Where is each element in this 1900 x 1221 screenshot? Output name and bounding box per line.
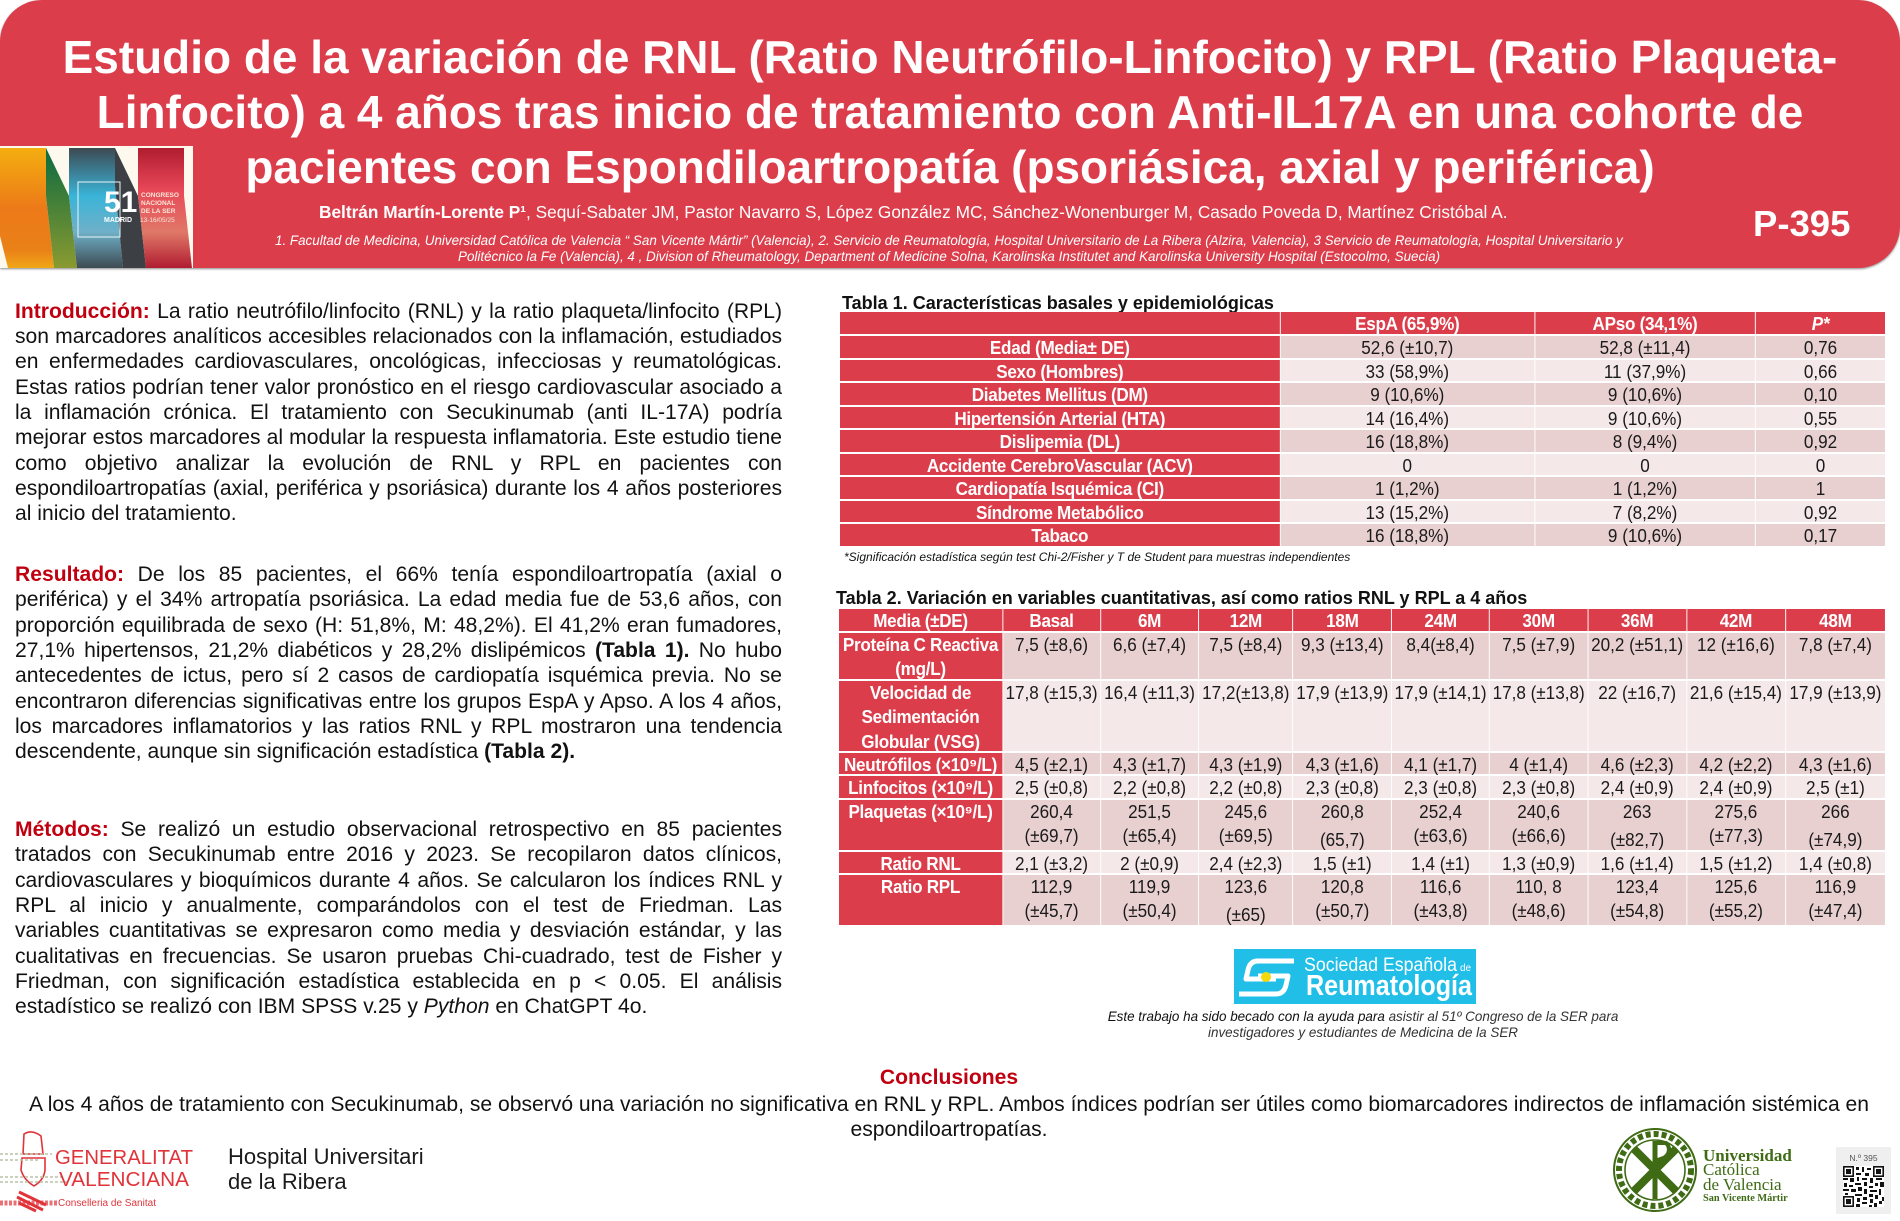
table 1: baseline characteristics: 0,10 xyxy=(1804,385,1837,405)
table 1: baseline characteristics: 1 (1,2%) xyxy=(1613,479,1677,499)
table 2: quantitative variables: 20,2 (±51,1) xyxy=(1591,635,1683,655)
affiliations: 1. Facultad de Medicina, Universidad Católica de Valencia “ San Vicente Mártir” (Valencia), 2. Servicio de Reumatología, Hospital Universitario de La Ribera (Alzira, Valencia), 3 Servicio de Reumatología, Hospital Universitario y xyxy=(275,233,1623,248)
table 2: quantitative variables: 120,8 xyxy=(1321,877,1364,897)
table 2: quantitative variables: (±65) xyxy=(1226,905,1266,925)
text block: introducción: la inflamación crónica. El tratamiento con Secukinumab (anti IL-17A) podría xyxy=(15,401,782,424)
poster number: P-395 xyxy=(1753,203,1850,244)
table 1: baseline characteristics: 33 (58,9%) xyxy=(1365,362,1449,382)
table 2 header row: 6M xyxy=(1138,611,1161,631)
table 2: quantitative variables: 7,5 (±7,9) xyxy=(1502,635,1575,655)
table 2: quantitative variables: (mg/L) xyxy=(895,659,946,679)
table 1 heading: Tabla 1. Características basales y epidemiológicas xyxy=(842,293,1274,313)
table 1: baseline characteristics: 0 xyxy=(1403,456,1412,476)
table 2: quantitative variables: 2 (±0,9) xyxy=(1120,854,1179,874)
table 2: quantitative variables: 2,2 (±0,8) xyxy=(1113,778,1186,798)
table 2: quantitative variables: 17,8 (±15,3) xyxy=(1005,683,1098,703)
table 1: baseline characteristics: 16 (18,8%) xyxy=(1365,432,1449,452)
table 2: quantitative variables: Neutrófilos (×10⁹/L) xyxy=(844,755,997,775)
table 2: quantitative variables: 2,3 (±0,8) xyxy=(1502,778,1575,798)
table 2: quantitative variables: 7,5 (±8,4) xyxy=(1209,635,1282,655)
table 2 header row: 48M xyxy=(1819,611,1852,631)
conclusions heading: Conclusiones xyxy=(880,1066,1018,1089)
table 2: quantitative variables: 2,4 (±2,3) xyxy=(1209,854,1282,874)
table 1: baseline characteristics: 16 (18,8%) xyxy=(1365,526,1449,546)
table 1: baseline characteristics: 0,55 xyxy=(1804,409,1837,429)
table 2: quantitative variables: 2,3 (±0,8) xyxy=(1306,778,1379,798)
hospital name: Hospital Universitari xyxy=(228,1144,424,1168)
table 2: quantitative variables: 110, 8 xyxy=(1515,877,1562,897)
table 1: baseline characteristics: 0,92 xyxy=(1804,432,1837,452)
table 2 header row: 36M xyxy=(1621,611,1653,631)
text block: métodos: Friedman, con significación estadística establecida en p < 0.05. El análisis xyxy=(15,970,782,993)
title: Linfocito) a 4 años tras inicio de tratamiento con Anti-IL17A en una cohorte de xyxy=(97,86,1803,138)
affiliations xyxy=(275,233,1624,264)
table 2: quantitative variables: Sedimentación xyxy=(862,707,979,727)
table 2: quantitative variables: 125,6 xyxy=(1715,877,1757,897)
table 2: quantitative variables: 17,9 (±13,9) xyxy=(1296,683,1388,703)
table 1: baseline characteristics: Accidente CerebroVascular (ACV) xyxy=(927,456,1193,476)
table 2 heading: Tabla 2. Variación en variables cuantitativas, así como ratios RNL y RPL a 4 años xyxy=(836,588,1527,608)
table 2: quantitative variables: 4,3 (±1,6) xyxy=(1799,755,1872,775)
table 2 header row: 30M xyxy=(1522,611,1555,631)
table 2: quantitative variables: (±50,4) xyxy=(1123,901,1177,921)
title xyxy=(63,31,1837,193)
icon: congress banner: 51 xyxy=(104,186,137,219)
conclusions text xyxy=(29,1092,1869,1141)
text block: métodos xyxy=(15,818,782,1018)
table 2: quantitative variables: (±69,5) xyxy=(1219,826,1273,846)
text block: resultado: los marcadores inflamatorios y las ratios RNL y RPL mostraron una tendencia xyxy=(15,715,782,738)
text block: resultado: Resultado: De los 85 pacientes, el 66% tenía espondiloartropatía (axial o xyxy=(15,563,782,586)
table 2 header row: Media (±DE) xyxy=(873,611,968,631)
table 2: quantitative variables: 123,6 xyxy=(1224,877,1267,897)
grant note: Este trabajo ha sido becado con la ayuda para asistir al 51º Congreso de la SER para xyxy=(1108,1009,1618,1024)
table 1: baseline characteristics: 13 (15,2%) xyxy=(1365,503,1449,523)
table 1: baseline characteristics: 52,6 (±10,7) xyxy=(1361,338,1453,358)
conclusions text: espondiloartropatías. xyxy=(850,1118,1048,1141)
table 2: quantitative variables: 2,2 (±0,8) xyxy=(1209,778,1282,798)
text block: resultado: 27,1% hipertensos, 21,2% diabéticos y 28,2% dislipémicos (Tabla 1). No hubo xyxy=(15,639,782,662)
table 2 header row: 12M xyxy=(1230,611,1262,631)
text block: resultado: encontraron diferencias significativas entre los grupos EspA y Apso. A los 4 años, xyxy=(15,690,782,713)
table 2: quantitative variables: 116,6 xyxy=(1420,877,1461,897)
authors: Beltrán Martín-Lorente P¹, Sequí-Sabater JM, Pastor Navarro S, López González MC, Sánchez-Wonenburger M, Casado Poveda D, Martínez Cristóbal A. xyxy=(319,202,1508,222)
table 2: quantitative variables: 8,4(±8,4) xyxy=(1406,635,1475,655)
table 2: quantitative variables: (±77,3) xyxy=(1709,826,1763,846)
table 2 header row: 18M xyxy=(1326,611,1359,631)
table 1: baseline characteristics: 11 (37,9%) xyxy=(1604,362,1686,382)
table 2: quantitative variables: 240,6 xyxy=(1517,802,1560,822)
table 2: quantitative variables: 9,3 (±13,4) xyxy=(1301,635,1384,655)
text block: métodos: RPL al inicio y anualmente, comparándolos con el test de Friedman. Las xyxy=(15,894,782,917)
table 2: quantitative variables: 245,6 xyxy=(1224,802,1267,822)
table 2: quantitative variables: 4,2 (±2,2) xyxy=(1699,755,1772,775)
text block: métodos: cualitativas en frecuencias. Se usaron pruebas Chi-cuadrado, test de Fisher y xyxy=(15,945,782,968)
table 2: quantitative variables: (±47,4) xyxy=(1808,901,1862,921)
table 1: baseline characteristics: Sexo (Hombres) xyxy=(996,362,1123,382)
text block: introducción: Introducción: La ratio neutrófilo/linfocito (RNL) y la ratio plaqueta/linfocito (RPL) xyxy=(15,300,782,322)
icon: congress banner: MADRID xyxy=(104,217,132,224)
table 1: baseline characteristics: 0,76 xyxy=(1804,338,1837,358)
table 2: quantitative variables: 260,4 xyxy=(1030,802,1073,822)
logo: Generalitat Valenciana: VALENCIANA xyxy=(59,1169,190,1191)
table 2: quantitative variables: 6,6 (±7,4) xyxy=(1113,635,1186,655)
table 2: quantitative variables: 7,8 (±7,4) xyxy=(1799,635,1872,655)
text block: introducción: Estas ratios podrían tener valor pronóstico en el riesgo cardiovascular asociado a xyxy=(15,376,782,399)
conclusions text: A los 4 años de tratamiento con Secukinumab, se observó una variación no significativa en RNL y RPL. Ambos índices podrían ser útiles como biomarcadores indirectos de inflamación sistémica en xyxy=(29,1092,1869,1116)
table 2: quantitative variables: 1,3 (±0,9) xyxy=(1502,854,1575,874)
icon: congress banner: 13-16/05/25 xyxy=(140,217,175,224)
table 2: quantitative variables: 2,1 (±3,2) xyxy=(1015,854,1088,874)
logo: Universidad Católica de Valencia xyxy=(1613,1128,1792,1212)
grant note xyxy=(1108,1009,1618,1040)
table 1: baseline characteristics: 0 xyxy=(1640,456,1650,476)
table 2: quantitative variables: 4,1 (±1,7) xyxy=(1404,755,1477,775)
table 2: quantitative variables: 119,9 xyxy=(1129,877,1170,897)
table 2: quantitative variables: 2,5 (±0,8) xyxy=(1015,778,1088,798)
table 2: quantitative variables: 1,4 (±0,8) xyxy=(1799,854,1872,874)
icon: congress banner: DE LA SER xyxy=(141,208,176,215)
table 2 header row: 42M xyxy=(1720,611,1752,631)
table 2: quantitative variables: Ratio RNL xyxy=(880,854,961,874)
table 2: quantitative variables: (±45,7) xyxy=(1024,901,1079,921)
table 2: quantitative variables: 16,4 (±11,3) xyxy=(1104,683,1195,703)
text block: resultado: periférica) y el 34% artropatía psoriásica. La edad media fue de 53,6 años, con xyxy=(15,588,782,611)
table 2: quantitative variables: 4,6 (±2,3) xyxy=(1601,755,1674,775)
text block: métodos: cardiovasculares y bioquímicos durante 4 años. Se calcularon los índices RNL y xyxy=(15,869,782,892)
table 1: baseline characteristics: Síndrome Metabólico xyxy=(976,503,1144,523)
logo: Universidad Católica de Valencia: de Valencia xyxy=(1703,1175,1782,1194)
table 1 header row: P* xyxy=(1812,314,1829,334)
table 1: baseline characteristics: 9 (10,6%) xyxy=(1370,385,1444,405)
table 1: baseline characteristics: 0,66 xyxy=(1804,362,1837,382)
table 2: quantitative variables: 116,9 xyxy=(1815,877,1856,897)
table 2: quantitative variables: (±69,7) xyxy=(1024,826,1079,846)
table 2: quantitative variables: 4,3 (±1,9) xyxy=(1209,755,1282,775)
table 2: quantitative variables: (±43,8) xyxy=(1414,901,1468,921)
hospital name: de la Ribera xyxy=(228,1168,347,1194)
logo: Universidad Católica de Valencia: San Vicente Mártir xyxy=(1703,1193,1788,1204)
table 1 header row: EspA (65,9%) xyxy=(1355,314,1459,334)
text block: introducción: como objetivo analizar la evolución de RNL y RPL en pacientes con xyxy=(15,452,782,475)
text block: métodos: estadístico se realizó con IBM SPSS v.25 y Python en ChatGPT 4o. xyxy=(15,995,647,1018)
table 2: quantitative variables: (±55,2) xyxy=(1709,901,1763,921)
QR code panel: N.º 395 xyxy=(1849,1153,1878,1163)
table 2: quantitative variables: Velocidad de xyxy=(870,683,971,703)
table 1 header row: APso (34,1%) xyxy=(1593,314,1697,334)
table 2: quantitative variables: (±74,9) xyxy=(1808,830,1862,850)
table 2: quantitative variables: 266 xyxy=(1821,802,1850,822)
text block: métodos: Métodos: Se realizó un estudio observacional retrospectivo en 85 pacientes xyxy=(15,818,782,841)
table 2: quantitative variables: Linfocitos (×10⁹/L) xyxy=(848,778,993,798)
table 2: quantitative variables: (65,7) xyxy=(1320,830,1365,850)
table 2: quantitative variables: (±66,6) xyxy=(1512,826,1566,846)
table 2: quantitative variables: Proteína C Reactiva xyxy=(843,635,998,655)
table 1: baseline characteristics: 9 (10,6%) xyxy=(1608,385,1682,405)
table 2: quantitative variables: 22 (±16,7) xyxy=(1598,683,1676,703)
table 2: quantitative variables: 17,8 (±13,8) xyxy=(1493,683,1585,703)
logo: Generalitat Valenciana: GENERALITAT xyxy=(55,1147,193,1169)
title: Estudio de la variación de RNL (Ratio Neutrófilo-Linfocito) y RPL (Ratio Plaqueta- xyxy=(63,31,1837,83)
table 2: quantitative variables: 4,5 (±2,1) xyxy=(1015,755,1088,775)
table 2 header row: Basal xyxy=(1029,611,1074,631)
table 2: quantitative variables: (±50,7) xyxy=(1315,901,1369,921)
title: pacientes con Espondiloartropatía (psoriásica, axial y periférica) xyxy=(245,141,1655,193)
table 2: quantitative variables: (±82,7) xyxy=(1610,830,1664,850)
table 1: baseline characteristics xyxy=(840,312,1885,546)
text block: resultado: proporción equilibrada de sexo (H: 51,8%, M: 48,2%). El 41,2% eran fumadores, xyxy=(15,614,782,637)
icon: SER logo: Sociedad Española xyxy=(1304,955,1457,976)
table 1: baseline characteristics: 1 xyxy=(1816,479,1825,499)
table 2: quantitative variables: (±54,8) xyxy=(1610,901,1664,921)
table 2: quantitative variables: 112,9 xyxy=(1031,877,1072,897)
text block: introducción: mejorar estos marcadores al modular la respuesta inflamatoria. Este estudio tiene xyxy=(15,426,782,449)
icon: SER logo: de xyxy=(1460,963,1472,974)
hospital name xyxy=(228,1144,424,1194)
table 2: quantitative variables: 1,5 (±1,2) xyxy=(1699,854,1772,874)
table 1 header row xyxy=(840,312,1885,334)
table 1: baseline characteristics: 0 xyxy=(1816,456,1825,476)
table 2: quantitative variables xyxy=(839,609,1885,925)
table 1: baseline characteristics: Tabaco xyxy=(1031,526,1088,546)
text block: resultado: antecedentes de ictus, pero sí 2 casos de cardiopatía isquémica previa. No se xyxy=(15,664,782,687)
table 2: quantitative variables: 2,4 (±0,9) xyxy=(1699,778,1772,798)
icon: congress banner: NACIONAL xyxy=(141,200,175,207)
table 2: quantitative variables: 260,8 xyxy=(1321,802,1364,822)
table 2: quantitative variables: 21,6 (±15,4) xyxy=(1690,683,1782,703)
icon: congress banner xyxy=(0,146,193,268)
table 1: baseline characteristics: Hipertensión Arterial (HTA) xyxy=(954,409,1165,429)
table 1: baseline characteristics: 7 (8,2%) xyxy=(1613,503,1677,523)
header banner xyxy=(0,0,1900,268)
table 2: quantitative variables: 1,6 (±1,4) xyxy=(1601,854,1674,874)
table 2: quantitative variables: Globular (VSG) xyxy=(861,732,980,752)
text block: métodos: tratados con Secukinumab entre 2016 y 2023. Se recopilaron datos clínicos, xyxy=(15,843,782,866)
table 2: quantitative variables: 123,4 xyxy=(1616,877,1659,897)
text block: introducción xyxy=(15,300,782,525)
table 2: quantitative variables: 263 xyxy=(1623,802,1651,822)
table 2: quantitative variables: (±63,6) xyxy=(1414,826,1468,846)
QR code panel xyxy=(1836,1147,1891,1214)
table 1: baseline characteristics: 14 (16,4%) xyxy=(1365,409,1449,429)
text block: introducción: espondiloartropatías (axial, periférica y psoriásica) durante los 4 años posteriores xyxy=(15,477,782,500)
table 2 header row xyxy=(839,609,1885,631)
table 2: quantitative variables: 275,6 xyxy=(1715,802,1757,822)
table 2: quantitative variables: 7,5 (±8,6) xyxy=(1015,635,1088,655)
text block: introducción: en enfermedades cardiovasculares, oncológicas, infecciosas y reumatológicas. xyxy=(15,350,782,373)
table 2 header row: 24M xyxy=(1424,611,1457,631)
table 2: quantitative variables: 4,3 (±1,7) xyxy=(1113,755,1186,775)
logo: Universidad Católica de Valencia: Católica xyxy=(1703,1160,1760,1179)
table 1: baseline characteristics: 8 (9,4%) xyxy=(1613,432,1677,452)
text block: métodos: variables cuantitativas se expresaron como media y desviación estándar, y las xyxy=(15,919,782,942)
table 2: quantitative variables: 2,5 (±1) xyxy=(1806,778,1865,798)
table 1: baseline characteristics: 0,17 xyxy=(1804,526,1837,546)
logo: Generalitat Valenciana xyxy=(0,1131,193,1212)
text block: introducción: al inicio del tratamiento. xyxy=(15,502,237,525)
table 2: quantitative variables: Plaquetas (×10⁹/L) xyxy=(848,802,993,822)
table 1 footnote: *Significación estadística según test Chi-2/Fisher y T de Student para muestras independientes xyxy=(844,550,1350,564)
table 1: baseline characteristics: Edad (Media± DE) xyxy=(990,338,1130,358)
table 2: quantitative variables: 1,5 (±1) xyxy=(1313,854,1372,874)
text block: resultado xyxy=(15,563,782,763)
text block: resultado: descendente, aunque sin significación estadística (Tabla 2). xyxy=(15,740,575,763)
table 2: quantitative variables: 17,2(±13,8) xyxy=(1202,683,1289,703)
table 2: quantitative variables: 12 (±16,6) xyxy=(1697,635,1775,655)
table 2: quantitative variables: 251,5 xyxy=(1128,802,1171,822)
table 1: baseline characteristics: 9 (10,6%) xyxy=(1608,409,1682,429)
table 2: quantitative variables: 252,4 xyxy=(1419,802,1462,822)
table 1: baseline characteristics: Diabetes Mellitus (DM) xyxy=(972,385,1148,405)
logo: Universidad Católica de Valencia: Universidad xyxy=(1703,1146,1792,1165)
table 2: quantitative variables: 4,3 (±1,6) xyxy=(1306,755,1379,775)
grant note: investigadores y estudiantes de Medicina de la SER xyxy=(1208,1025,1518,1040)
table 2: quantitative variables: Ratio RPL xyxy=(881,877,960,897)
table 2: quantitative variables: (±48,6) xyxy=(1512,901,1566,921)
table 1: baseline characteristics: 0,92 xyxy=(1804,503,1837,523)
affiliations: Politécnico la Fe (Valencia), 4 , Division of Rheumatology, Department of Medicine Solna, Karolinska Institutet and Karolinska University Hospital (Estocolmo, Suecia) xyxy=(458,249,1440,264)
table 1: baseline characteristics: 52,8 (±11,4) xyxy=(1600,338,1690,358)
table 2: quantitative variables: 2,3 (±0,8) xyxy=(1404,778,1477,798)
table 2: quantitative variables: 1,4 (±1) xyxy=(1411,854,1470,874)
text block: introducción: son marcadores analíticos accesibles relacionados con la inflamación, estudiados xyxy=(15,325,782,348)
table 1: baseline characteristics: Cardiopatía Isquémica (CI) xyxy=(956,479,1164,499)
table 2: quantitative variables: 17,9 (±13,9) xyxy=(1789,683,1881,703)
table 2: quantitative variables: 17,9 (±14,1) xyxy=(1395,683,1487,703)
table 1: baseline characteristics: 9 (10,6%) xyxy=(1608,526,1682,546)
icon: SER logo xyxy=(1234,949,1476,1004)
logo: Generalitat Valenciana: Conselleria de Sanitat xyxy=(58,1198,156,1209)
table 2: quantitative variables: 4 (±1,4) xyxy=(1509,755,1568,775)
table 2: quantitative variables: (±65,4) xyxy=(1123,826,1177,846)
icon: congress banner: CONGRESO xyxy=(141,192,179,199)
table 2: quantitative variables: 2,4 (±0,9) xyxy=(1601,778,1674,798)
table 1: baseline characteristics: Dislipemia (DL) xyxy=(1000,432,1120,452)
table 1: baseline characteristics: 1 (1,2%) xyxy=(1375,479,1440,499)
